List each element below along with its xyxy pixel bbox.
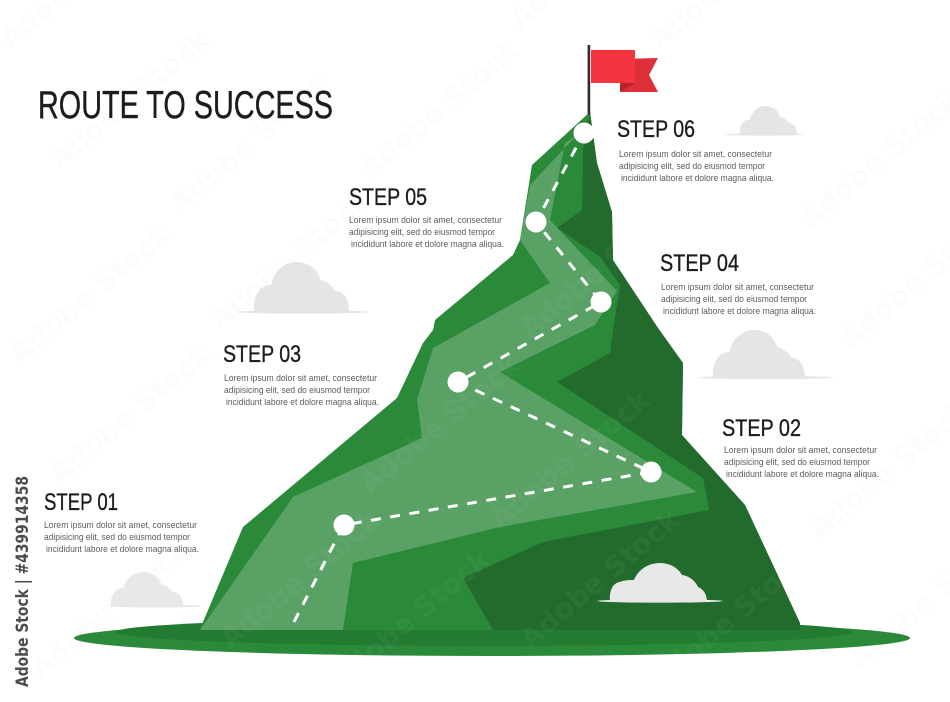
step 05 text: adipisicing elit, sed do eiusmod tempor (349, 226, 495, 237)
title: ROUTE TO SUCCESS (38, 84, 333, 127)
step 05 text: Lorem ipsum dolor sit amet, consectetur (349, 214, 502, 225)
step 01 text: Lorem ipsum dolor sit amet, consectetur (44, 519, 197, 530)
stock id label: Adobe Stock | #439914358 (13, 476, 33, 687)
step 02 text (722, 415, 879, 479)
step 06 text: adipisicing elit, sed do eiusmod tempor (619, 160, 765, 171)
step 03 text: adipisicing elit, sed do eiusmod tempor (224, 384, 370, 395)
step 01 text: incididunt labore et dolore magna aliqua. (46, 543, 199, 554)
watermark on mountain: Adobe Stock (513, 192, 687, 345)
mountain dark shaded face (463, 112, 800, 630)
ground ellipse (74, 618, 910, 656)
watermark on mountain: Adobe Stock (353, 347, 527, 500)
step 06 text (617, 116, 774, 183)
watermark on mountain: Adobe Stock (513, 502, 687, 655)
step 03 text: incididunt labore et dolore magna aliqua. (226, 396, 379, 407)
step 06 text: Lorem ipsum dolor sit amet, consectetur (619, 148, 772, 159)
step 03 text: STEP 03 (223, 341, 301, 368)
step 05 text: STEP 05 (349, 184, 427, 211)
step 06 text: STEP 06 (617, 116, 695, 143)
watermark on mountain (213, 192, 817, 695)
cloud: left of step 03 (237, 262, 369, 314)
step 01 text: STEP 01 (44, 489, 118, 516)
step 02 text: Lorem ipsum dolor sit amet, consectetur (724, 444, 877, 455)
step 01 text: adipisicing elit, sed do eiusmod tempor (44, 531, 190, 542)
step 04 text: STEP 04 (660, 250, 739, 277)
cloud: lower left (108, 572, 202, 608)
route dashed line (294, 133, 651, 622)
step 05 text (349, 184, 504, 249)
cloud: on mountain (597, 563, 723, 603)
step 02 text: STEP 02 (722, 415, 801, 442)
step 02 text: adipisicing elit, sed do eiusmod tempor (724, 456, 870, 467)
watermark on mountain: Adobe Stock (483, 382, 657, 535)
step 04 text: incididunt labore et dolore magna aliqua. (663, 305, 816, 316)
step 06 text: incididunt labore et dolore magna aliqua. (621, 172, 774, 183)
step 03 text: Lorem ipsum dolor sit amet, consectetur (224, 372, 377, 383)
cloud: right of mountain (698, 330, 834, 379)
watermark on mountain: Adobe Stock (643, 542, 817, 695)
step 05 text: incididunt labore et dolore magna aliqua. (351, 238, 504, 249)
step 04 text (660, 250, 816, 316)
mountain (200, 112, 817, 695)
watermark on mountain: Adobe Stock (213, 502, 387, 655)
watermark on mountain: Adobe Stock (323, 542, 497, 695)
mountain body (200, 112, 800, 630)
cloud: top right (724, 106, 804, 136)
light path band (200, 128, 697, 630)
route waypoints (334, 122, 662, 536)
step 03 text (223, 341, 379, 407)
flag (588, 45, 658, 115)
step 01 text (44, 489, 199, 554)
step 04 text: Lorem ipsum dolor sit amet, consectetur (661, 281, 814, 292)
step 04 text: adipisicing elit, sed do eiusmod tempor (661, 293, 807, 304)
step 02 text: incididunt labore et dolore magna aliqua. (726, 468, 879, 479)
